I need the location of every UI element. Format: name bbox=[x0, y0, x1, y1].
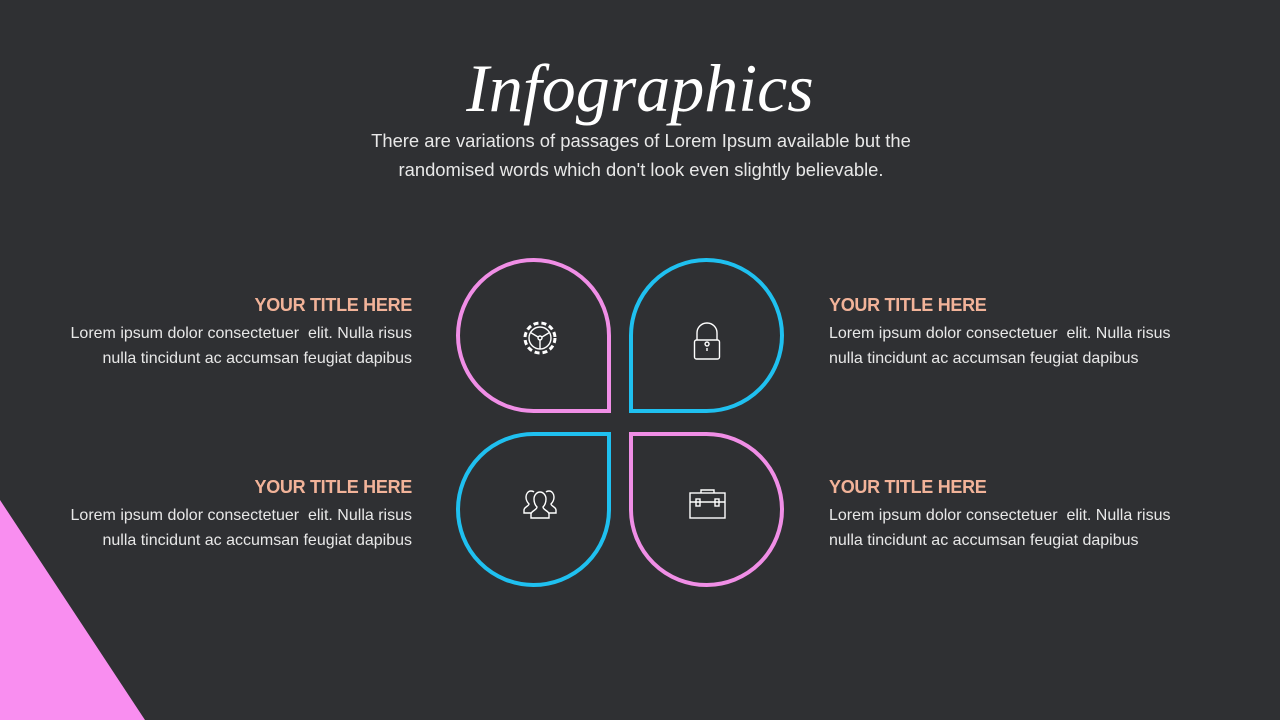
petal: bottom-left blue bbox=[458, 434, 609, 585]
text block: top-right: YOUR TITLE HERE bbox=[829, 295, 987, 315]
text block: top-right bbox=[829, 295, 1170, 367]
text block: top-left: Lorem ipsum dolor consectetuer elit. Nulla risus bbox=[71, 325, 412, 342]
subtitle: randomised words which don't look even slightly believable. bbox=[398, 159, 884, 180]
text block: bottom-right: nulla tincidunt ac accumsan feugiat dapibus bbox=[829, 532, 1139, 549]
text block: bottom-left bbox=[71, 477, 412, 549]
text block: top-left bbox=[71, 295, 412, 367]
text block: top-right: nulla tincidunt ac accumsan feugiat dapibus bbox=[829, 350, 1139, 367]
icon: briefcase bbox=[690, 490, 725, 518]
text block: bottom-left: nulla tincidunt ac accumsan feugiat dapibus bbox=[102, 532, 412, 549]
text block: top-left: nulla tincidunt ac accumsan feugiat dapibus bbox=[102, 350, 412, 367]
petal: bottom-right pink bbox=[631, 434, 782, 585]
text block: top-left: YOUR TITLE HERE bbox=[254, 295, 412, 315]
subtitle bbox=[371, 130, 911, 180]
text block: bottom-right: Lorem ipsum dolor consectetuer elit. Nulla risus bbox=[829, 507, 1170, 524]
text block: bottom-right bbox=[829, 477, 1170, 549]
title: Infographics bbox=[466, 50, 814, 126]
text block: bottom-left: YOUR TITLE HERE bbox=[254, 477, 412, 497]
icon: lock bbox=[694, 323, 720, 359]
petal: top-right blue bbox=[631, 260, 782, 411]
icon: gear bbox=[525, 323, 555, 353]
icon: people bbox=[524, 491, 556, 518]
subtitle: There are variations of passages of Lorem Ipsum available but the bbox=[371, 130, 911, 151]
text block: bottom-left: Lorem ipsum dolor consectetuer elit. Nulla risus bbox=[71, 507, 412, 524]
text block: top-right: Lorem ipsum dolor consectetuer elit. Nulla risus bbox=[829, 325, 1170, 342]
petal: top-left pink bbox=[458, 260, 609, 411]
text block: bottom-right: YOUR TITLE HERE bbox=[829, 477, 987, 497]
